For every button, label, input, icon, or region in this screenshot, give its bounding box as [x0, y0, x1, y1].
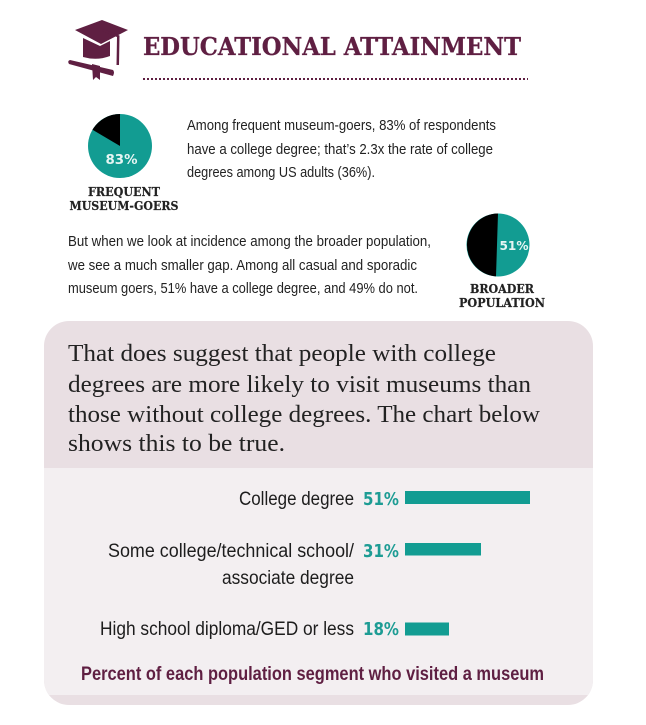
bar row: high school: 18% — [363, 619, 399, 640]
text block: broader population — [67, 233, 431, 297]
bar row: college degree: 51% — [363, 489, 399, 510]
label: frequent museum-goers: MUSEUM-GOERS — [70, 199, 178, 213]
text block: broader population: we see a much smaller gap. Among all casual and sporadic — [67, 257, 417, 274]
text block: frequent museum-goers — [187, 117, 496, 181]
bar row: some college: associate degree — [222, 568, 354, 589]
label: frequent museum-goers — [70, 185, 178, 213]
label: frequent museum-goers: FREQUENT — [88, 185, 160, 199]
icon: graduation cap and diploma — [68, 20, 128, 80]
text block: quote: those without college degrees. The chart below — [68, 402, 541, 428]
label: broader population — [459, 282, 545, 310]
chart caption: Percent of each population segment who visited a museum — [81, 664, 544, 685]
text block: frequent museum-goers: Among frequent museum-goers, 83% of respondents — [187, 117, 496, 134]
pie chart: frequent museum-goers 83%: 83% — [106, 153, 138, 168]
label: broader population: BROADER — [470, 282, 535, 296]
pie chart: frequent museum-goers 83% — [88, 114, 152, 178]
bar row: college degree — [239, 489, 530, 510]
label: broader population: POPULATION — [459, 296, 545, 310]
bar row: some college: 31% — [363, 541, 399, 562]
text block: broader population: museum goers, 51% have a college degree, and 49% do not. — [68, 280, 418, 297]
text block: frequent museum-goers: degrees among US adults (36%). — [187, 164, 375, 181]
bar row: some college: Some college/technical school/ — [108, 541, 355, 562]
pie chart: broader population 51%: 51% — [500, 239, 528, 253]
title: EDUCATIONAL ATTAINMENT — [143, 32, 521, 61]
text block: quote — [68, 341, 541, 457]
text block: quote: degrees are more likely to visit museums than — [68, 372, 531, 398]
panel: chart background — [44, 321, 593, 705]
text block: broader population: But when we look at incidence among the broader population, — [68, 233, 431, 250]
bar row: high school: High school diploma/GED or less — [100, 619, 354, 640]
dotted divider — [143, 78, 528, 80]
pie chart: broader population 51% — [466, 214, 530, 276]
text block: quote: shows this to be true. — [68, 431, 285, 457]
text block: quote: That does suggest that people with college — [68, 341, 496, 367]
text block: frequent museum-goers: have a college degree; that’s 2.3x the rate of college — [187, 141, 493, 158]
bar row: college degree: College degree — [239, 489, 354, 510]
bar row: some college — [108, 541, 481, 589]
